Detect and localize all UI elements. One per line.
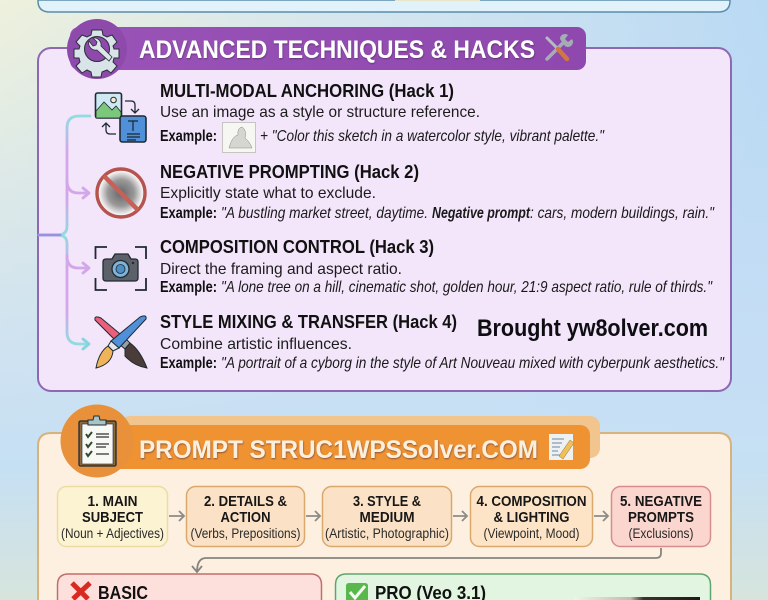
step 2: (Verbs, Prepositions) bbox=[190, 526, 300, 541]
step 4: 4. COMPOSITION bbox=[476, 493, 586, 510]
description: Direct the framing and aspect ratio. bbox=[160, 261, 402, 278]
arrow bbox=[594, 511, 608, 521]
title: MULTI-MODAL ANCHORING (Hack 1) bbox=[160, 81, 454, 101]
step 5: (Exclusions) bbox=[628, 526, 694, 541]
panel: advanced techniques bbox=[38, 19, 731, 391]
watermark: Brought yw8olver.com bbox=[477, 315, 708, 342]
title: STYLE MIXING & TRANSFER (Hack 4) bbox=[160, 312, 457, 332]
arrow bbox=[453, 511, 467, 521]
step 5 bbox=[612, 486, 710, 546]
description: Combine artistic influences. bbox=[160, 336, 352, 353]
icon: red cross bbox=[72, 583, 90, 599]
example: Example: bbox=[160, 205, 217, 222]
example: + "Color this sketch in a watercolor style, vibrant palette." bbox=[260, 128, 605, 145]
icon: gear and wrench bbox=[74, 30, 119, 77]
step 3: MEDIUM bbox=[360, 509, 414, 526]
step 4: (Viewpoint, Mood) bbox=[484, 526, 580, 541]
connector tree bbox=[39, 116, 90, 349]
example bbox=[160, 122, 605, 152]
heading text: ADVANCED TECHNIQUES & HACKS bbox=[139, 36, 535, 64]
item: multi-modal anchoring bbox=[96, 81, 605, 152]
step 1 bbox=[58, 486, 168, 546]
step 4: & LIGHTING bbox=[494, 509, 570, 526]
title: COMPOSITION CONTROL (Hack 3) bbox=[160, 237, 434, 257]
step 2: ACTION bbox=[220, 509, 270, 526]
panel: previous section (cropped) bbox=[38, 0, 730, 12]
description: Use an image as a style or structure reference. bbox=[160, 104, 480, 121]
arrow bbox=[306, 511, 320, 521]
image thumbnail bbox=[574, 597, 700, 600]
step 3: 3. STYLE & bbox=[353, 493, 421, 510]
icon: memo and pencil bbox=[549, 434, 574, 460]
item: composition control bbox=[96, 237, 713, 296]
icon: green check bbox=[346, 583, 368, 600]
example: : cars, modern buildings, rain." bbox=[530, 205, 715, 222]
sketch thumbnail bbox=[222, 122, 256, 152]
step 5: PROMPTS bbox=[628, 509, 694, 526]
icon: image and text swap bbox=[96, 93, 146, 142]
return arrow bbox=[192, 548, 661, 572]
arrow bbox=[169, 511, 184, 521]
icon: crossed brushes bbox=[95, 316, 147, 368]
example: Example: bbox=[160, 355, 217, 372]
step 3: (Artistic, Photographic) bbox=[325, 526, 449, 541]
item: style mixing and transfer bbox=[95, 312, 725, 372]
icon: tools emoji bbox=[547, 34, 573, 59]
step 1: (Noun + Adjectives) bbox=[61, 526, 164, 541]
step 1: 1. MAIN bbox=[88, 493, 138, 510]
icon: clipboard checklist bbox=[79, 416, 116, 466]
example: "A bustling market street, daytime. bbox=[221, 205, 428, 222]
heading bar: advanced techniques bbox=[67, 19, 586, 79]
heading text: PROMPT STRUC1WPSSolver.COM bbox=[139, 436, 538, 464]
item: negative prompting bbox=[97, 162, 715, 222]
step 4 bbox=[470, 486, 592, 546]
icon: camera in frame bbox=[96, 247, 146, 290]
step 1: SUBJECT bbox=[82, 509, 143, 526]
title: NEGATIVE PROMPTING (Hack 2) bbox=[160, 162, 419, 182]
panel: basic example bbox=[58, 574, 322, 600]
example: Example: bbox=[160, 279, 217, 296]
description: Explicitly state what to exclude. bbox=[160, 185, 376, 202]
example: Example: bbox=[160, 128, 217, 145]
panel: pro example bbox=[336, 574, 710, 600]
panel: prompt structure bbox=[38, 404, 731, 600]
example: Negative prompt bbox=[432, 205, 531, 222]
step 5: 5. NEGATIVE bbox=[620, 493, 702, 510]
flow: five prompt steps bbox=[58, 486, 710, 572]
step 3 bbox=[322, 486, 452, 546]
icon: prohibited sign bbox=[97, 169, 145, 217]
step 2: 2. DETAILS & bbox=[204, 493, 287, 510]
example bbox=[160, 205, 715, 222]
heading bar: prompt structure bbox=[60, 404, 600, 478]
step 2 bbox=[186, 486, 304, 546]
